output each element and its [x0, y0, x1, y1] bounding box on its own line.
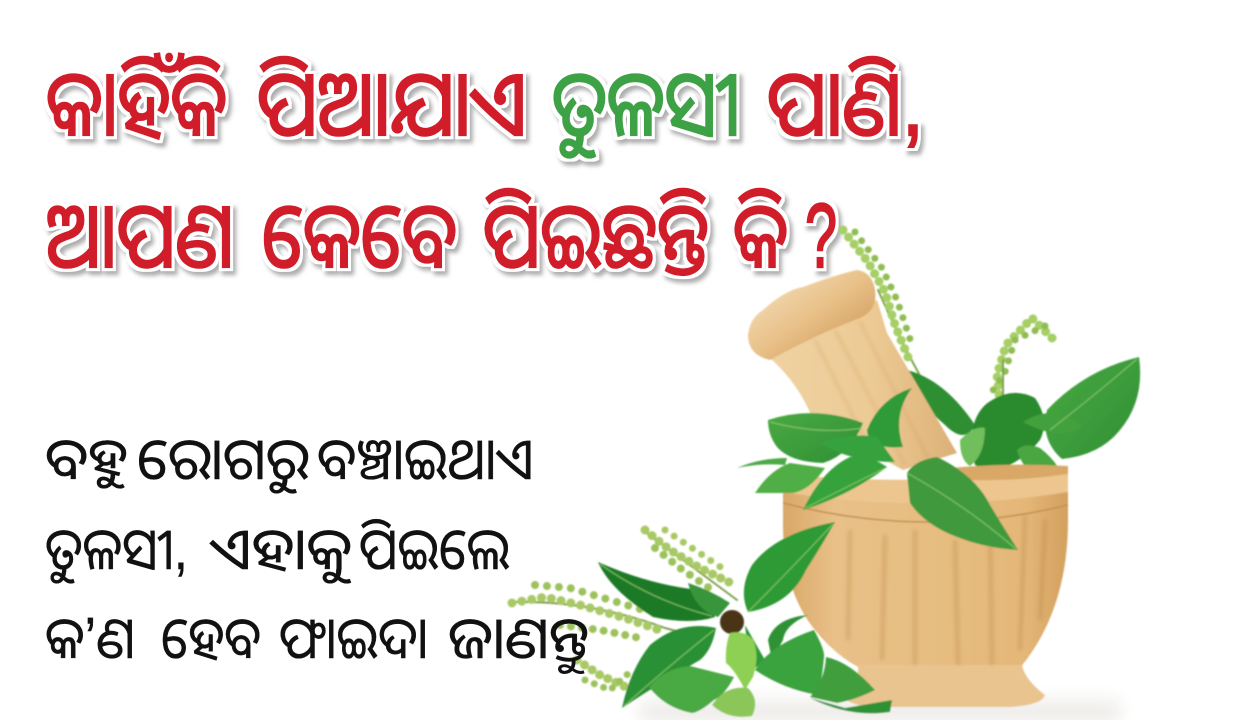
body line three: ଫାଇଦା: [279, 606, 428, 671]
title line one: କାହିଁକି: [46, 53, 227, 155]
flower sprigs in the foreground: [510, 530, 737, 690]
title line one: [46, 53, 924, 158]
body line three: [45, 606, 589, 674]
title line one: ପାଣି,: [767, 54, 924, 155]
mortar: [783, 465, 1068, 707]
body line two: ପିଇଲେ: [359, 517, 510, 582]
body line two: ଏହାକୁ: [209, 517, 352, 584]
title: [46, 53, 924, 287]
title line two: ?: [805, 186, 837, 287]
title line one: ତୁଳସୀ: [552, 54, 740, 158]
body line one: ବଞ୍ଚାଇଥାଏ: [317, 427, 534, 492]
title line two: କେବେ: [262, 186, 457, 287]
leaves behind the pestle: [907, 357, 1140, 486]
title line two: ପିଇଛନ୍ତି: [483, 186, 709, 287]
body line three: କ’ଣ: [45, 606, 135, 671]
body line one: [45, 427, 534, 494]
body line three: ଜାଣନ୍ତୁ: [448, 606, 589, 674]
body line one: ବହୁ: [45, 427, 128, 492]
title line two: ଆପଣ: [46, 186, 234, 287]
flower sprigs behind the mortar: [843, 230, 1052, 440]
foreground tulsi leaves: [598, 522, 892, 717]
body text: [45, 427, 589, 674]
title line two: କି: [733, 186, 788, 287]
body line two: ତୁଳସୀ,: [45, 517, 188, 584]
leaves in the mortar: [737, 388, 1018, 550]
body line two: [45, 517, 510, 584]
body line three: ହେବ: [161, 606, 261, 671]
title line one: ପିଆଯାଏ: [257, 54, 527, 155]
illustration: mortar, pestle and tulsi: [510, 230, 1140, 720]
title line two: [46, 186, 837, 287]
body line one: ରୋଗରୁ: [137, 427, 309, 494]
floor reflection: [640, 692, 1120, 720]
pestle: [748, 270, 957, 470]
